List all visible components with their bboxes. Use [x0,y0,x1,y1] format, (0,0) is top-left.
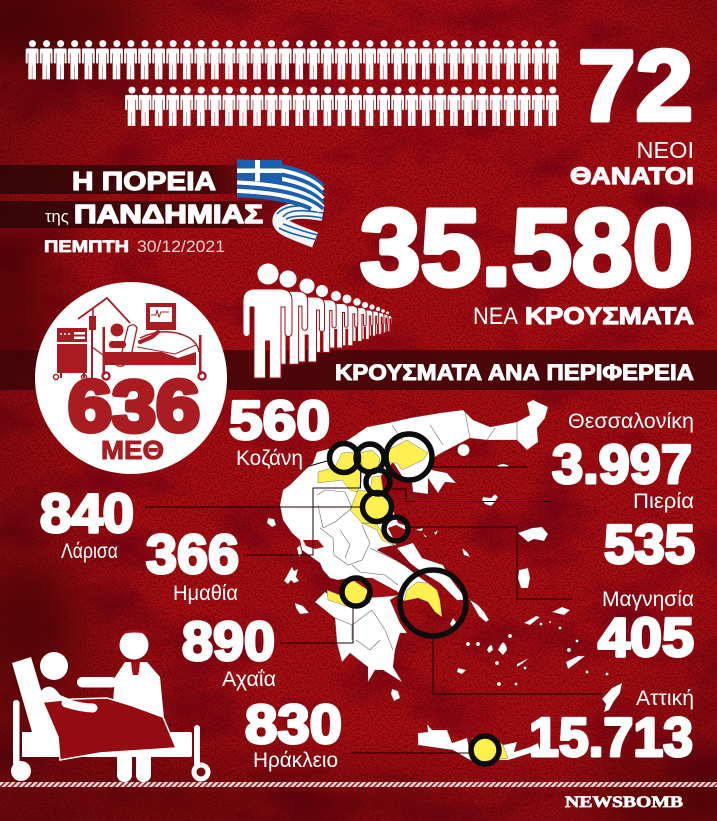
regional section band [0,350,717,390]
region: Thessaloniki: Θεσσαλονίκη [568,410,694,433]
region: Kozani [229,389,330,470]
region: Imathia: Ημαθία [173,582,238,605]
region: Larisa: 840 [40,482,134,544]
deaths caption [570,137,694,190]
mainland and islands [267,400,622,760]
date line [44,237,225,256]
region: Kozani: Κοζάνη [236,447,303,470]
new cases caption: ΚΡΟΥΣΜΑΤΑ [525,303,694,330]
ICU number: 636 [68,367,200,447]
region: Imathia: 366 [146,523,239,585]
striped footer rule [0,782,717,787]
region: Kozani: 560 [229,389,330,451]
ICU label: ΜΕΘ [101,435,164,465]
region: Magnesia: 405 [598,606,694,668]
region: Achaia: 890 [182,610,275,672]
deaths caption: ΘΑΝΑΤΟΙ [570,163,694,190]
pictogram: queue of people [243,263,392,378]
title: Η ΠΟΡΕΙΑ [72,166,216,196]
new cases number: 35.580 [360,187,693,309]
highlighted regions [318,440,508,762]
region: Pieria: 535 [604,513,695,575]
map of Greece [145,400,622,764]
region: Thessaloniki: 3.997 [552,433,692,495]
region: Pieria: Πιερία [633,490,694,513]
region: Attica: 15.713 [529,706,693,768]
date line: ΠΕΜΠΤΗ [44,237,129,256]
regional section heading: ΚΡΟΥΣΜΑΤΑ ΑΝΑ ΠΕΡΙΦΕΡΕΙΑ [335,360,694,385]
date line: 30/12/2021 [137,237,225,256]
region: Heraklion: 830 [245,693,342,755]
new cases caption [473,303,694,330]
red gulf cut-outs inside circles [350,525,408,598]
new cases caption: ΝΕΑ [473,303,518,330]
region: Heraklion: Ηράκλειο [253,749,338,772]
logo: Newsbomb: NEWSBOMB [565,794,683,811]
region: Magnesia: Μαγνησία [602,588,694,611]
icon: nurse and patient [11,630,208,782]
region borders [317,412,517,650]
leader lines [145,461,602,753]
ICU circle badge [35,282,227,474]
region: Achaia: Αχαΐα [222,668,276,691]
deaths caption: ΝΕΟΙ [637,137,694,163]
title: ΠΑΝΔΗΜΙΑΣ [74,199,263,229]
title [45,166,263,229]
region circles [330,434,499,764]
icon: Greek flag ribbon [237,160,323,240]
title banner bars [0,165,285,228]
title: της [45,208,69,226]
pictogram: 72 deaths [26,40,559,126]
icon: ICU bed and equipment [54,298,206,380]
region: Attica: Αττική [636,687,694,710]
deaths number: 72 [578,30,693,142]
region: Larisa: Λάρισα [61,540,118,563]
